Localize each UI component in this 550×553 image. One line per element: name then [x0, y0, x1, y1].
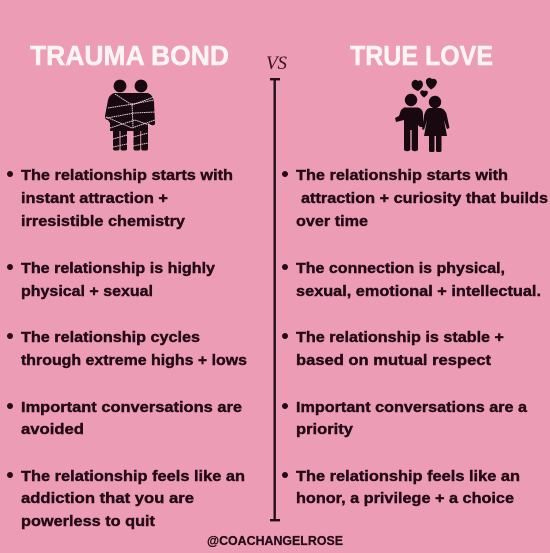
bullet item 5: powerless to quit — [21, 513, 155, 530]
bullet item 4 — [282, 399, 528, 438]
bullet item 1 — [282, 167, 548, 230]
bullet item 5: The relationship feels like an — [296, 468, 520, 485]
bullet item 4: avoided — [21, 421, 84, 438]
bullet item 4 — [7, 399, 242, 438]
center divider line — [270, 78, 280, 521]
bullet item 4: priority — [296, 421, 354, 438]
bullet item 2 — [7, 260, 216, 300]
icon: two figures bound by rope — [105, 80, 155, 150]
bullet item 3: based on mutual respect — [296, 352, 491, 369]
bullet item 2: The relationship is highly — [21, 260, 216, 277]
title: true love: TRUE LOVE — [350, 40, 493, 71]
bullet item 1: instant attraction + — [21, 190, 168, 207]
bullet item 5 — [282, 468, 520, 507]
bullet item 2 — [282, 260, 541, 300]
icon: woman — [422, 96, 450, 152]
bullet item 3: The relationship is stable + — [296, 329, 504, 346]
bullet item 4: Important conversations are — [21, 399, 242, 416]
bullet item 1 — [7, 167, 233, 230]
title: trauma bond: TRAUMA BOND — [30, 40, 229, 71]
bullet item 3: The relationship cycles — [21, 329, 200, 346]
bullet item 5: addiction that you are — [21, 490, 194, 507]
bullet item 5: honor, a privilege + a choice — [296, 490, 514, 507]
bullet item 3 — [282, 329, 504, 369]
bullet item 3 — [7, 329, 247, 369]
icon: hearts — [412, 78, 437, 98]
bullet item 2: physical + sexual — [21, 283, 153, 300]
bullet item 1: over time — [296, 213, 368, 230]
bullet item 1: The relationship starts with — [21, 167, 233, 184]
bullet item 5 — [7, 468, 245, 530]
bullet item 2: sexual, emotional + intellectual. — [296, 283, 541, 300]
footer handle: @COACHANGELROSE — [207, 533, 343, 548]
icon: couple with hearts — [395, 78, 450, 152]
column: trauma bond list — [7, 167, 247, 530]
bullet item 1: The relationship starts with — [296, 167, 508, 184]
bullet item 1: irresistible chemistry — [21, 213, 186, 230]
bullet item 4: Important conversations are a — [296, 399, 528, 416]
column: true love list — [282, 167, 548, 507]
icon: man — [395, 94, 423, 151]
vs label: VS — [266, 53, 287, 74]
bullet item 2: The connection is physical, — [296, 260, 505, 277]
bullet item 5: The relationship feels like an — [21, 468, 245, 485]
bullet item 1: attraction + curiosity that builds — [301, 190, 548, 207]
bullet item 3: through extreme highs + lows — [21, 352, 247, 369]
